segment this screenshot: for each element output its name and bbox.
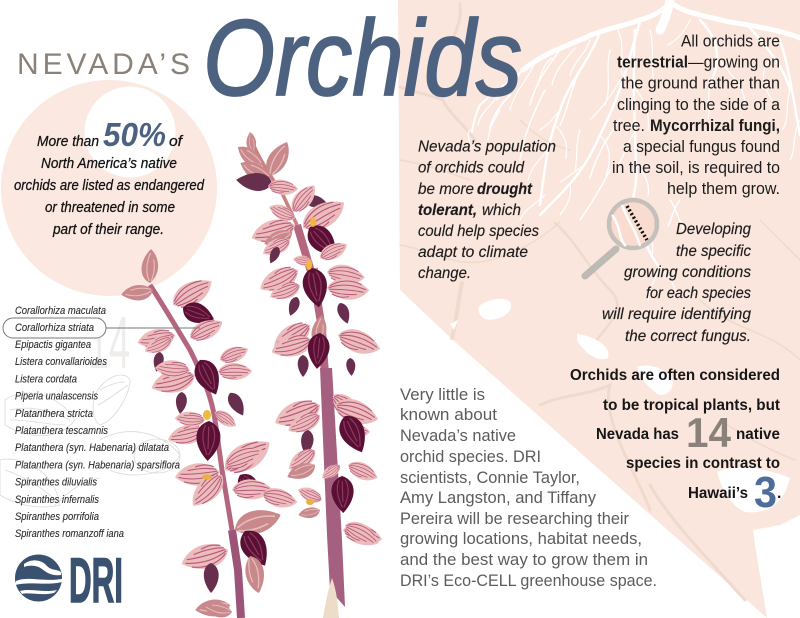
big number: 3: 3 [754, 468, 777, 517]
callout: 50% of native orchids: part of their range. [52, 222, 164, 238]
callout: 50% of native orchids: orchids are listed as endangered [14, 178, 205, 194]
logo: DRI [15, 546, 123, 616]
text block: terrestrial orchids [612, 33, 781, 198]
callout: 50% of native orchids [1, 80, 217, 296]
text block: very little is known: Nevada’s native [400, 427, 516, 445]
plant roots [468, 0, 800, 300]
text block: drought tolerance: adapt to climate [418, 244, 528, 261]
text block: drought tolerance: Nevada’s population [418, 139, 556, 156]
species list: Spiranthes porrifolia [15, 511, 99, 523]
text block: species comparison: species in contrast to [626, 455, 780, 472]
species list: Platanthera stricta [15, 408, 93, 420]
text block: very little is known: growing locations, habitat needs, [400, 530, 642, 548]
text block: developing growing conditions [602, 221, 751, 345]
text block: drought tolerance: tolerant, [418, 202, 477, 219]
orchid photo: left stalk [121, 248, 300, 618]
logo globe [15, 554, 62, 602]
text block: very little is known: known about [400, 406, 497, 424]
text block: very little is known: Amy Langston, and Tiffany [400, 489, 597, 507]
species list [3, 305, 200, 540]
species list: Spiranthes diluvialis [15, 476, 97, 488]
line art: faint floral drawing behind list [0, 301, 180, 507]
text block: very little is known: DRI’s Eco-CELL greenhouse space. [400, 572, 657, 590]
callout: 50% of native orchids: More than [37, 134, 99, 150]
text block: terrestrial orchids: All orchids are [681, 33, 780, 51]
text block: very little is known [400, 386, 657, 590]
text block: developing growing conditions: the specific [676, 243, 751, 260]
text block: terrestrial orchids: —growing on [688, 54, 780, 72]
text block: drought tolerance: drought [477, 181, 533, 198]
text block: species comparison: to be tropical plants, but [603, 397, 780, 414]
text block: terrestrial orchids: a special fungus found [623, 138, 780, 156]
text block: developing growing conditions: for each species [646, 285, 751, 302]
species list: Listera cordata [15, 374, 77, 386]
callout: 50% of native orchids: of [169, 134, 184, 150]
text block: very little is known: Pereira will be researching their [400, 510, 629, 528]
text block: drought tolerance: be more [418, 181, 474, 198]
species list: Platanthera (syn. Habenaria) dilatata [15, 442, 169, 454]
text block: species comparison: Nevada has [596, 426, 679, 443]
species list: Corallorhiza maculata [15, 305, 106, 317]
text block: very little is known: and the best way to grow them in [400, 551, 648, 569]
text block: terrestrial orchids: terrestrial [617, 54, 688, 72]
species list: Listera convallarioides [15, 356, 107, 368]
callout: 50% of native orchids: North America’s native [41, 156, 177, 172]
text block: terrestrial orchids: the ground rather than [621, 75, 780, 93]
text block: drought tolerance: of orchids could [418, 160, 525, 177]
text block: species comparison [570, 367, 781, 517]
species list: Platanthera (syn. Habenaria) sparsiflora [15, 460, 180, 472]
text block: species comparison: Orchids are often considered [570, 367, 780, 384]
species list: Spiranthes romanzoff iana [15, 528, 124, 540]
title: Orchids: Orchids [203, 0, 522, 118]
species list: Spiranthes infernalis [15, 494, 99, 506]
species list: Epipactis gigantea [15, 339, 91, 351]
big number: 14: 14 [686, 409, 732, 456]
text block: terrestrial orchids: in the soil, is required to [612, 159, 780, 177]
species list: Platanthera tescamnis [15, 425, 108, 437]
text block: developing growing conditions: growing conditions [624, 264, 751, 281]
text block: species comparison: Hawaii’s [688, 485, 748, 502]
title [17, 0, 522, 118]
text block: terrestrial orchids: help them grow. [667, 180, 780, 198]
panel: Nevada map background [398, 0, 800, 618]
map rivers [400, 4, 800, 600]
text block: species comparison: native [736, 426, 780, 443]
text: DRI [69, 546, 123, 616]
icon: magnifying glass [585, 200, 657, 276]
text block: drought tolerance: could help species [418, 223, 539, 240]
text block: developing growing conditions: Developing [676, 221, 751, 238]
title: NEVADA'S: NEVADA’S [17, 48, 190, 81]
text block: drought tolerance [418, 139, 556, 282]
text block: terrestrial orchids: clinging to the side of a [617, 96, 781, 114]
text block: developing growing conditions: the correct fungus. [625, 328, 751, 345]
text block: terrestrial orchids: Mycorrhizal fungi, [650, 117, 780, 135]
text block: terrestrial orchids: tree. [613, 117, 645, 135]
text block: very little is known: Very little is [400, 386, 485, 404]
orchid photo: right stalk [233, 132, 385, 618]
text block: drought tolerance: change. [418, 265, 471, 282]
callout: 50% of native orchids: or threatened in some [45, 200, 175, 216]
species list: Corallorhiza striata [15, 322, 94, 334]
text block: very little is known: orchid species. DRI [400, 448, 541, 466]
text block: species comparison: . [777, 485, 781, 502]
text block: developing growing conditions: will require identifying [602, 306, 751, 323]
cream bract [323, 578, 339, 618]
line art: faint floral drawing behind list: 14 [88, 301, 130, 384]
species list: Piperia unalascensis [15, 390, 98, 402]
highlight pill and leader line [3, 318, 200, 338]
big number: 50%: 50% [103, 116, 166, 153]
text block: drought tolerance: which [482, 202, 521, 219]
text block: very little is known: scientists, Connie Taylor, [400, 469, 580, 487]
map lakes [450, 299, 790, 512]
